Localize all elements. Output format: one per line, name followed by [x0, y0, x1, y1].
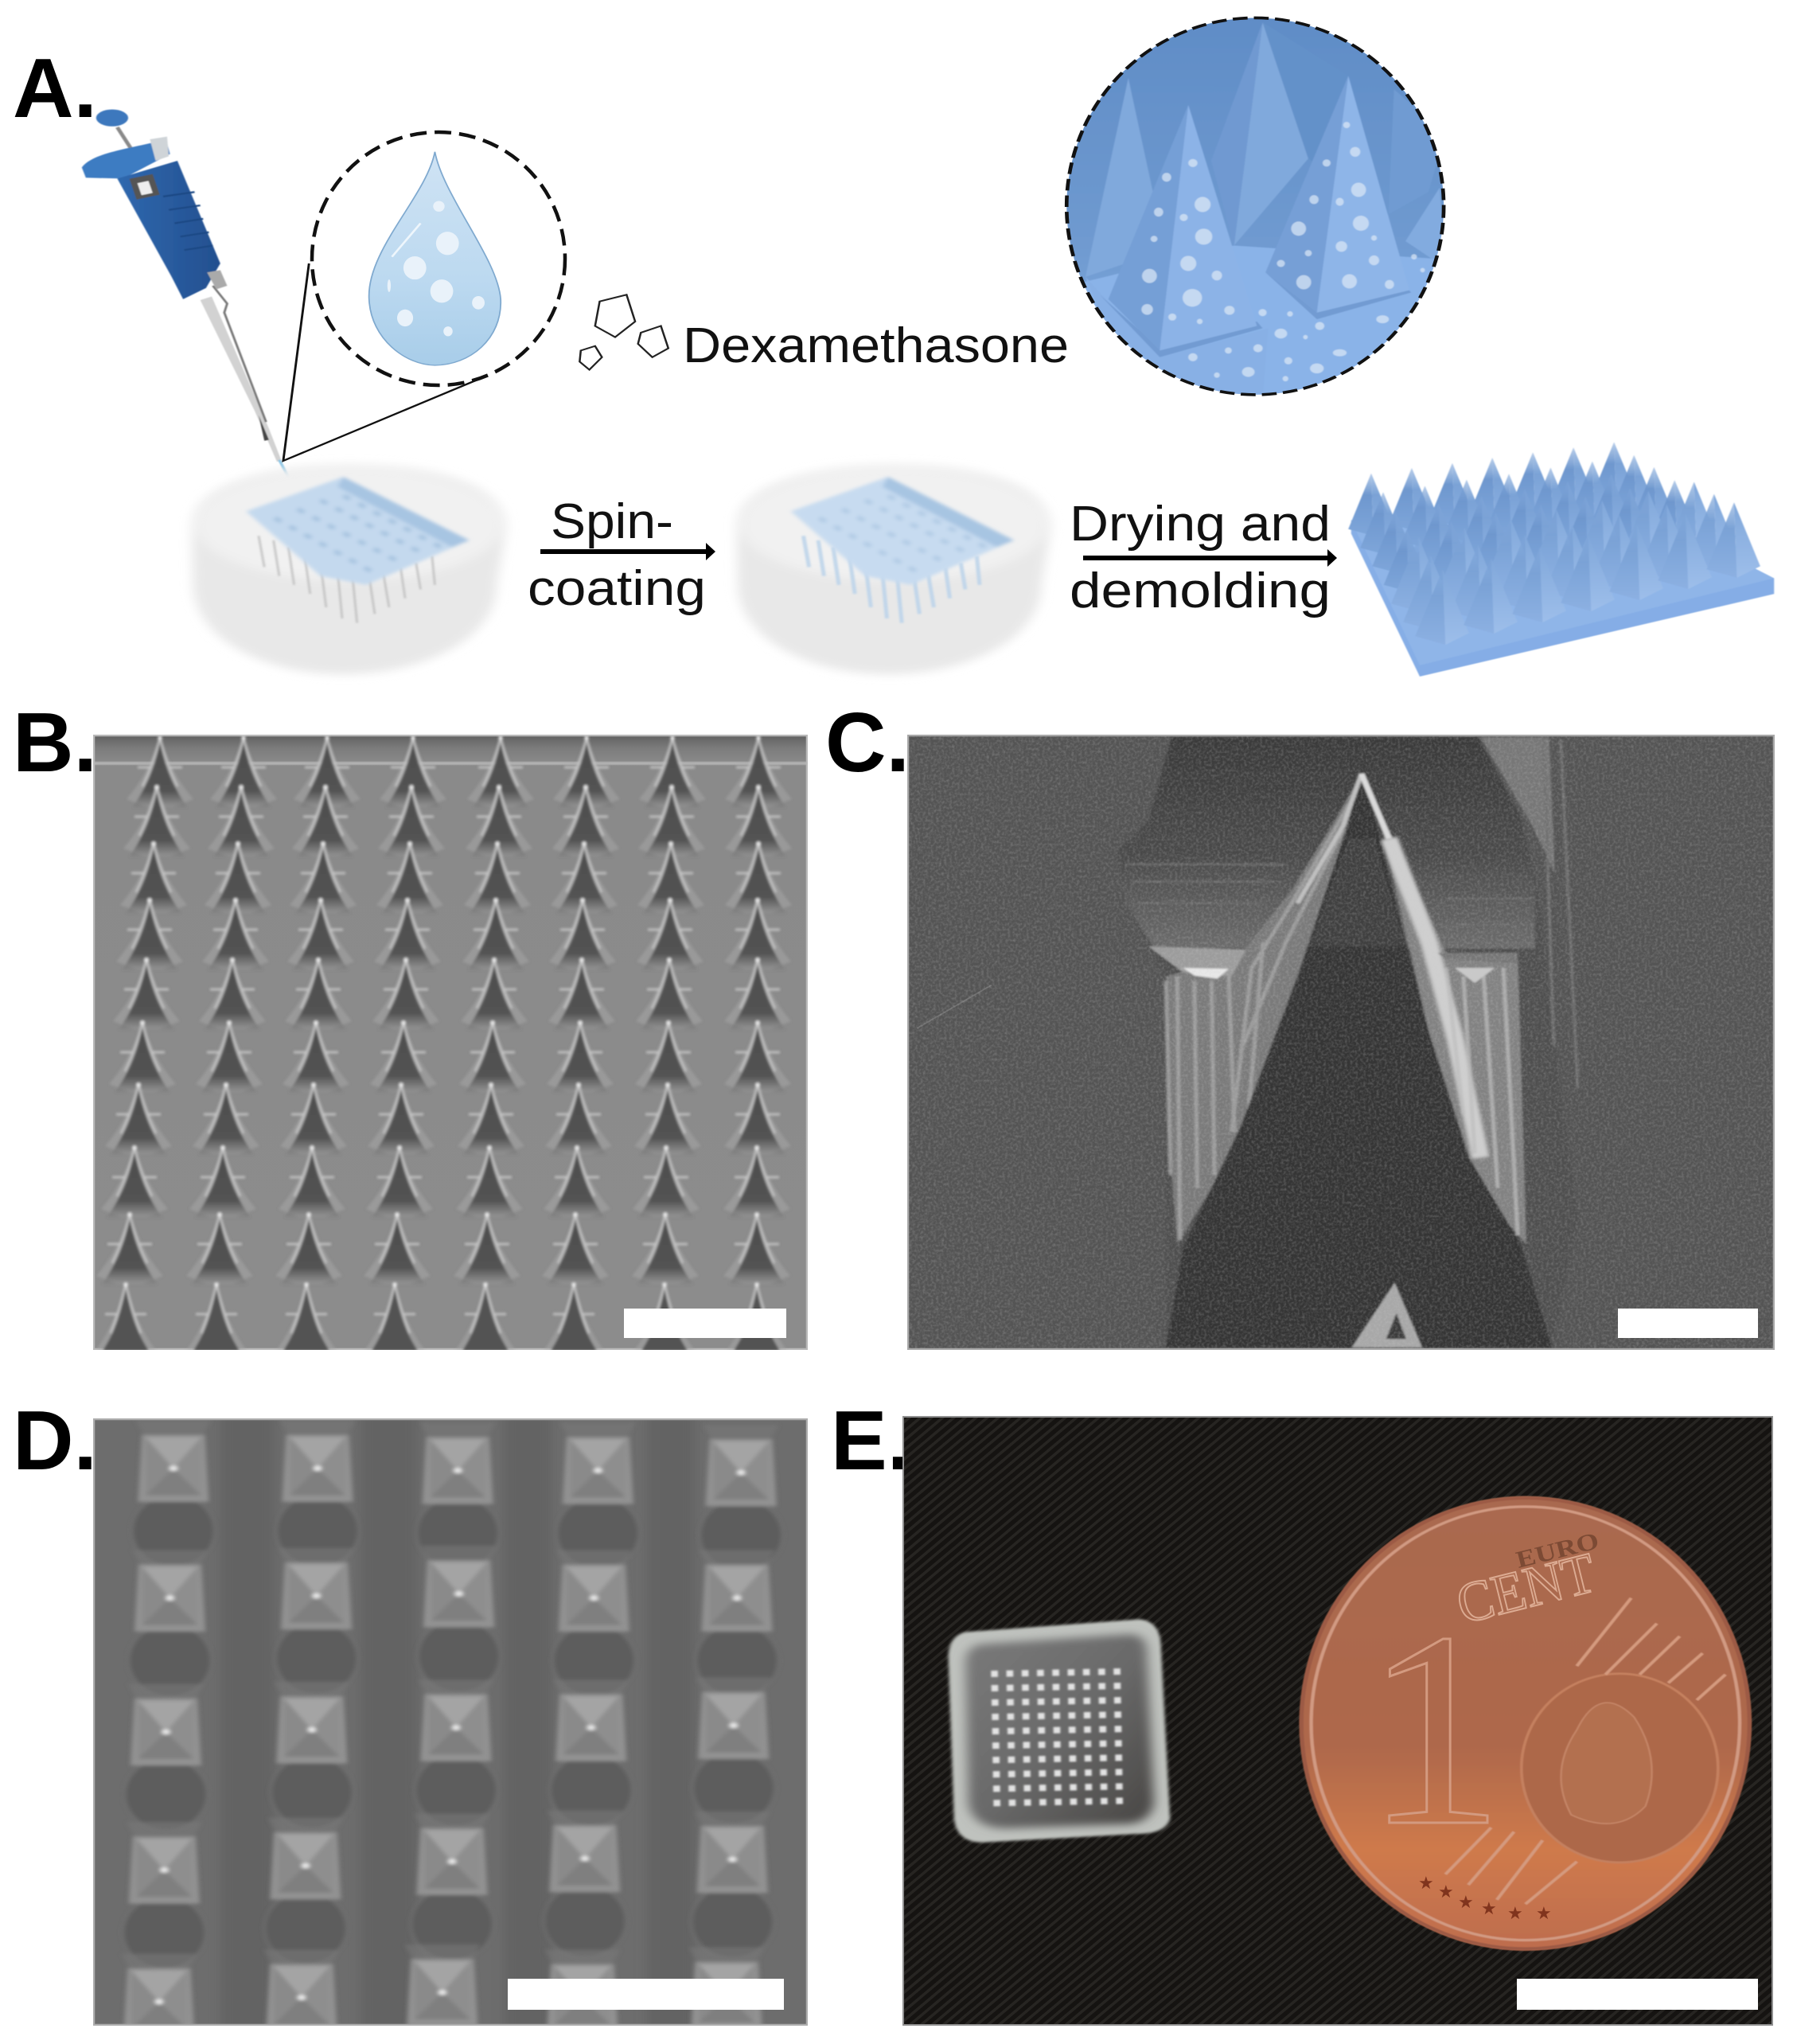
coin stars: ★ [1438, 1882, 1454, 1902]
panel C: SEM of single microneedle [907, 735, 1775, 1350]
scale bar B [624, 1309, 786, 1338]
coin stars: ★ [1418, 1873, 1434, 1893]
coin [1299, 1496, 1752, 1951]
zoomed microneedle circle [1062, 14, 1451, 402]
icon: drug droplet [369, 152, 501, 365]
panel E: photo of patch beside coin [902, 1416, 1773, 2026]
coin denomination: 1 [1365, 1574, 1504, 1883]
dashed circle with droplet [312, 132, 565, 385]
label: Drying and demolding with arrow [1070, 497, 1337, 618]
mold with drug droplet [192, 464, 506, 674]
label: Drying and demolding with arrow: Drying and [1070, 497, 1331, 552]
coated mold [736, 464, 1051, 674]
microneedle patch [949, 1619, 1170, 1843]
label D: D. [13, 1394, 97, 1488]
scale bar D [508, 1979, 784, 2010]
icon: pipette [82, 109, 296, 492]
label: Dexamethasone: Dexamethasone [683, 318, 1069, 373]
scale bar E [1517, 1979, 1758, 2010]
label E: E. [831, 1394, 910, 1488]
coin text EURO: EURO [1514, 1527, 1602, 1574]
coin stars [1418, 1873, 1552, 1923]
scale bar C [1618, 1309, 1758, 1338]
microneedle array [1348, 442, 1774, 677]
coin stars: ★ [1481, 1898, 1497, 1918]
icon: dexamethasone molecules [579, 295, 668, 370]
panel A: fabrication schematic [13, 14, 1774, 677]
label: Spin-coating with arrow: coating [528, 561, 706, 616]
label B: B. [13, 696, 97, 790]
coin text CENT: CENT [1451, 1540, 1602, 1636]
label: Drying and demolding with arrow: demolding [1070, 564, 1331, 618]
panel B: SEM of microneedle array [93, 735, 808, 1351]
coin stars: ★ [1536, 1903, 1552, 1923]
label A: A. [13, 41, 97, 135]
callout lines from pipette tip to droplet [283, 263, 477, 461]
label: Spin-coating with arrow: Spin- [551, 494, 673, 549]
label: Spin-coating with arrow [528, 494, 715, 616]
label C: C. [825, 696, 910, 790]
coin stars: ★ [1507, 1903, 1523, 1923]
coin stars: ★ [1458, 1892, 1474, 1912]
panel D: SEM top view of array [93, 1402, 808, 2044]
